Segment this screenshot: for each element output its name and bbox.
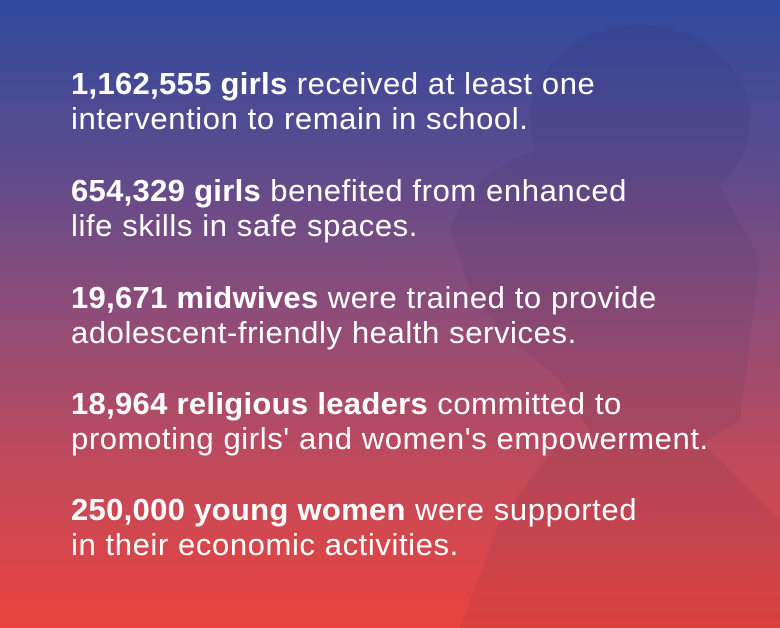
stat: religious leaders: promoting girls' and women's empowerment. (71, 421, 709, 456)
stat: life skills: 654,329 girls benefited from enhanced (71, 173, 627, 208)
stat: girls in school: 1,162,555 girls received at least one (71, 66, 595, 101)
stat: girls in school: intervention to remain in school. (71, 101, 528, 136)
stat: midwives: 19,671 midwives were trained to provide (71, 280, 657, 315)
stat: midwives: adolescent-friendly health services. (71, 315, 577, 350)
stat: midwives (71, 280, 657, 350)
stat: religious leaders: 18,964 religious leaders committed to (71, 386, 622, 421)
stat: religious leaders (71, 386, 709, 456)
stat: life skills (71, 173, 627, 243)
stat: young women (71, 492, 637, 562)
stat: young women: in their economic activities. (71, 527, 459, 562)
stat: life skills: life skills in safe spaces. (71, 208, 418, 243)
stat: girls in school (71, 66, 595, 136)
stat: young women: 250,000 young women were supported (71, 492, 637, 527)
